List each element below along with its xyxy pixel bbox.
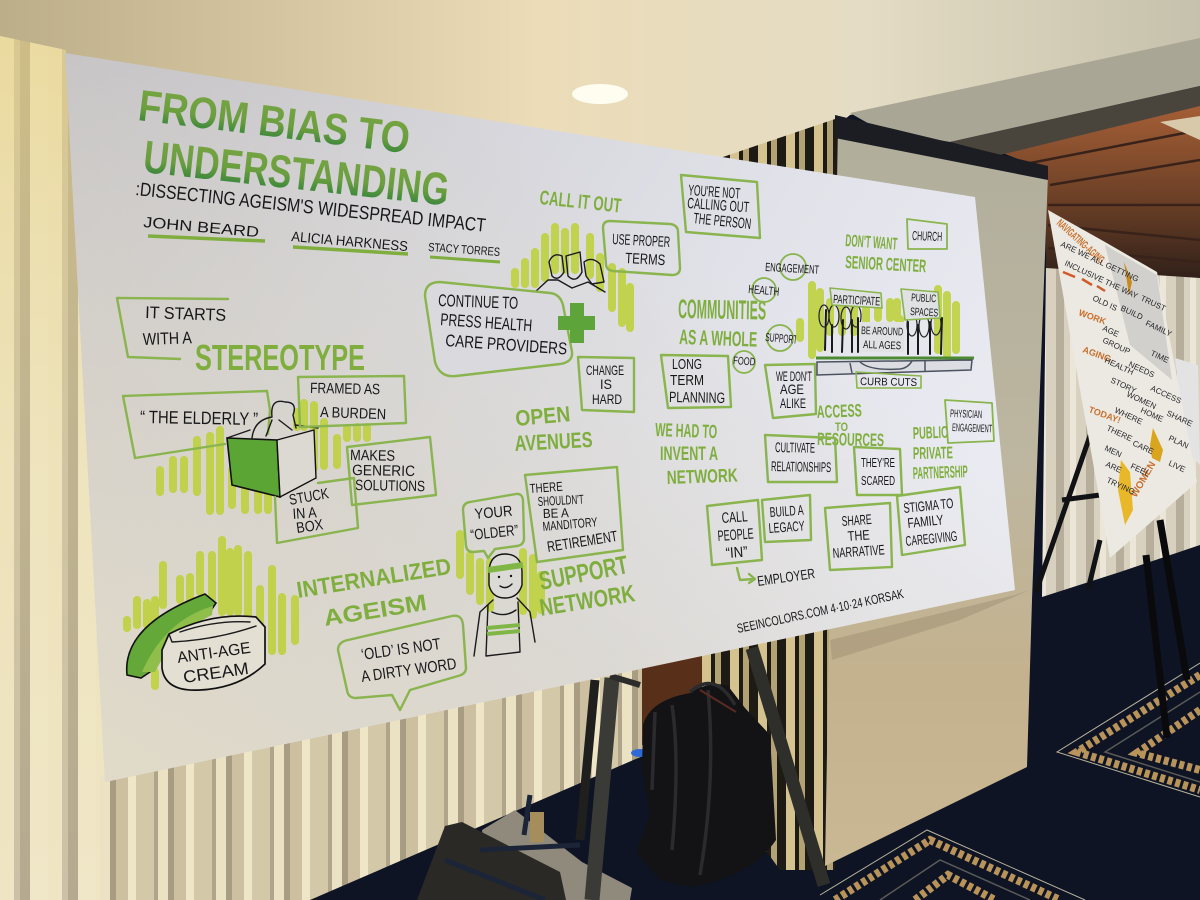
callout: mandatory retirement: SHOULDN'T — [537, 492, 584, 509]
callout: curb cuts: CURB CUTS — [860, 376, 917, 389]
callout: stuck in a box: STUCK — [288, 485, 330, 509]
callout: continue to press health care providers: CARE PROVIDERS — [445, 331, 568, 359]
callout: your older: YOUR — [474, 503, 513, 523]
upper striped curtain — [720, 118, 838, 200]
callout: church — [907, 219, 947, 249]
callout: public spaces — [901, 289, 940, 320]
callout: change is hard: IS — [600, 376, 612, 392]
panel: main graphic recording board: COMMUNITIES — [678, 294, 766, 326]
callout: stigma to family caregiving — [897, 487, 965, 555]
heading: internalized ageism: AGEISM — [322, 589, 429, 631]
second board notes: FAMILY — [1144, 319, 1174, 339]
callout: old is not a dirty word: ‘OLD’ IS NOT — [360, 636, 442, 664]
icon: green plus — [558, 303, 595, 343]
callout: use proper terms: USE PROPER — [612, 231, 671, 251]
callout: long term planning: PLANNING — [669, 389, 725, 407]
second board notes: ARE WE ALL GETTING — [1059, 240, 1140, 284]
callout: change is hard: CHANGE — [586, 362, 624, 378]
callout: they're scared: SCARED — [861, 473, 895, 488]
callout: stuck in a box — [275, 478, 358, 543]
callout: stuck in a box: IN A — [292, 504, 317, 523]
second board notes: FEEL — [1129, 462, 1152, 479]
callout: public spaces: SPACES — [910, 306, 938, 319]
second board notes: WHERE — [1113, 406, 1144, 426]
board shadow on wall — [830, 590, 1030, 660]
bubble: engagement — [765, 254, 820, 280]
callout: makes generic solutions — [347, 437, 436, 505]
heading: access to resources: RESOURCES — [817, 429, 884, 450]
scribble: behind person — [460, 534, 541, 615]
panel: main graphic recording board: PARTNERSHIP — [912, 462, 968, 483]
bubble: engagement: ENGAGEMENT — [765, 260, 820, 277]
callout: participate — [830, 288, 882, 308]
second board notes: INCLUSIVE THE WAY — [1063, 259, 1140, 301]
callout: build a legacy — [762, 495, 811, 542]
soffit plane — [850, 38, 1200, 142]
callout: mandatory retirement — [525, 467, 623, 562]
callout: change is hard — [578, 357, 634, 412]
heading: we had to invent a network — [655, 420, 738, 489]
board sheet — [1048, 210, 1197, 558]
callout: change is hard: HARD — [592, 391, 622, 407]
callout: we don't age alike: AGE — [780, 381, 804, 397]
callout: use proper terms — [603, 221, 680, 275]
wood panel — [642, 652, 702, 745]
callout: stuck in a box: BOX — [295, 516, 324, 537]
heading: access to resources: ACCESS — [816, 400, 862, 422]
callout: stigma to family caregiving: CAREGIVING — [905, 528, 958, 549]
callout: call people in: “IN” — [725, 543, 748, 562]
title: UNDERSTANDING — [141, 130, 452, 216]
second board notes: LIVE — [1167, 459, 1187, 474]
second board notes: THERE — [1105, 424, 1134, 443]
callout: share the narrative: NARRATIVE — [832, 541, 885, 561]
second board notes: SHARE — [1165, 409, 1194, 428]
callout: physician engagement: PHYSICIAN — [950, 408, 982, 421]
wood ceiling — [1000, 104, 1200, 282]
callout: cultivate relationships: RELATIONSHIPS — [771, 458, 831, 475]
scribble: behind neighbourhood — [800, 285, 956, 355]
callout: you're not calling out the person: THE PERSON — [693, 210, 752, 233]
blue glow — [631, 749, 649, 757]
icon: person with headband — [474, 554, 535, 656]
heading: public private partnership: PRIVATE — [913, 443, 953, 463]
heading: communities as a whole: AS A WHOLE — [679, 326, 758, 352]
callout: framed as a burden: FRAMED AS — [310, 380, 380, 398]
heading: we had to invent a network: INVENT A — [660, 444, 718, 465]
second board notes: ACCESS — [1149, 384, 1183, 406]
callout: mandatory retirement: THERE — [529, 479, 563, 496]
callout: we don't age alike: WE DON'T — [776, 368, 812, 384]
arrow: call people in to employer — [737, 568, 755, 583]
heading: access to resources — [816, 400, 884, 450]
poster behind — [1175, 358, 1200, 465]
icon: anti-age cream jar — [127, 594, 265, 690]
callout: continue to press health care providers — [425, 282, 572, 376]
callout: old is not a dirty word: A DIRTY WORD — [360, 656, 458, 686]
back wall panel — [825, 125, 1048, 866]
callout: framed as a burden: A BURDEN — [320, 404, 386, 423]
second board notes: MEN — [1103, 444, 1123, 459]
label: employer: EMPLOYER — [756, 565, 816, 589]
panel: second board on easel — [1036, 210, 1200, 738]
second board notes: TRUST — [1139, 294, 1167, 313]
callout: physician engagement: ENGAGEMENT — [952, 422, 992, 435]
heading: support network: NETWORK — [538, 580, 637, 622]
subtitle: :DISSECTING AGEISM'S WIDESPREAD IMPACT — [134, 179, 487, 237]
callout: framed as a burden — [298, 376, 406, 427]
callout: your older: “OLDER” — [470, 522, 519, 544]
callout: call people in: CALL — [721, 508, 748, 527]
second board notes: WOMEN — [1129, 460, 1158, 500]
backpack — [636, 684, 776, 887]
credit line: SEEINCOLORS.COM 4·10·24 KORSAK — [736, 586, 905, 636]
callout: physician engagement — [945, 400, 994, 443]
bubble: food: FOOD — [733, 355, 756, 369]
callout: makes generic solutions: GENERIC — [352, 462, 415, 480]
callout: use proper terms: TERMS — [625, 250, 666, 269]
callout: makes generic solutions: SOLUTIONS — [355, 477, 425, 495]
callout: you're not calling out the person — [681, 175, 760, 238]
second board notes: AGING — [1081, 344, 1112, 364]
callout: participate: PARTICIPATE — [833, 292, 881, 308]
heading: support network: SUPPORT — [536, 549, 631, 596]
callout: they're scared — [854, 447, 902, 495]
callout: be around all ages — [859, 322, 904, 352]
second board notes: OLD IS — [1091, 294, 1119, 313]
callout: call people in — [707, 500, 762, 565]
bubble: food — [733, 351, 756, 373]
callout: share the narrative — [825, 503, 892, 570]
icon: neighbourhood crowd and curb — [816, 305, 974, 375]
lower striped curtain — [700, 610, 835, 870]
scribble: behind stereotype box — [160, 403, 367, 511]
ceiling rail — [950, 86, 1200, 155]
callout: it starts with a stereotype: WITH A — [142, 328, 193, 349]
callout: long term planning — [661, 355, 731, 408]
title — [136, 81, 452, 216]
icon: person in a box — [227, 401, 318, 497]
heading: we had to invent a network: WE HAD TO — [655, 420, 718, 443]
second board notes: AGE — [1101, 324, 1120, 339]
easel — [580, 648, 824, 900]
callout: we don't age alike — [765, 364, 816, 418]
callout: share the narrative: SHARE — [841, 511, 872, 529]
callout: the elderly — [123, 391, 270, 458]
speakers — [143, 214, 501, 262]
callout: build a legacy: BUILD A — [769, 502, 805, 520]
heading: communities as a whole — [678, 294, 766, 352]
callout: stigma to family caregiving: FAMILY — [907, 511, 945, 531]
callout: cultivate relationships — [765, 435, 837, 482]
speakers: ALICIA HARKNESS — [291, 228, 409, 254]
callout: stigma to family caregiving: STIGMA TO — [903, 495, 954, 516]
callout: it starts with a stereotype: STEREOTYPE — [195, 337, 365, 378]
lower curtain — [100, 660, 645, 900]
heading: support network — [536, 549, 637, 622]
ceiling light — [572, 84, 628, 104]
callout: mandatory retirement: BE A — [543, 505, 569, 521]
callout: curb cuts — [856, 372, 921, 389]
icon: three faces — [535, 252, 605, 292]
heading: call it out: CALL IT OUT — [538, 187, 622, 218]
second board notes: TRYING — [1105, 476, 1136, 497]
wall top bar — [835, 115, 1048, 180]
callout: mandatory retirement: MANDITORY — [542, 514, 598, 534]
callout: long term planning: LONG — [672, 356, 702, 373]
callout: long term planning: TERM — [670, 372, 704, 389]
heading: we had to invent a network: NETWORK — [666, 466, 738, 489]
second board heading: NAVIGATING-AGING — [1054, 217, 1107, 266]
heading: internalized ageism: INTERNALIZED — [295, 553, 453, 603]
heading: internalized ageism — [295, 553, 453, 631]
callout: share the narrative: THE — [847, 526, 870, 544]
callout: you're not calling out the person: CALLING OUT — [687, 195, 750, 216]
title: FROM BIAS TO — [136, 81, 413, 163]
heading: don't want senior center: DON'T WANT — [845, 231, 898, 254]
bubble: support: SUPPORT — [765, 330, 798, 347]
second board notes: BUILD — [1119, 304, 1145, 322]
heading: open avenues: OPEN — [514, 401, 571, 431]
callout: public spaces: PUBLIC — [911, 292, 936, 305]
heading: don't want senior center: SENIOR CENTER — [845, 252, 927, 276]
left curtain — [0, 36, 108, 900]
heading: public private partnership — [912, 423, 968, 483]
second board notes: HOME — [1139, 406, 1165, 424]
bag on floor — [417, 795, 632, 900]
second board notes: WOMEN — [1125, 390, 1158, 411]
right easel rear legs — [1146, 520, 1187, 738]
callout: be around all ages: BE AROUND — [861, 325, 903, 338]
bubble: health — [748, 278, 780, 302]
callout: continue to press health care providers: PRESS HEALTH — [440, 310, 533, 335]
callout: cultivate relationships: CULTIVATE — [775, 439, 815, 456]
ceiling — [0, 0, 1200, 220]
callout: be around all ages: ALL AGES — [863, 339, 901, 352]
callout: it starts with a stereotype — [117, 298, 365, 378]
callout: the elderly: “ THE ELDERLY ” — [140, 407, 258, 429]
callout: it starts with a stereotype: IT STARTS — [145, 303, 226, 325]
bubble: health: HEALTH — [748, 282, 780, 299]
speakers: STACY TORRES — [428, 240, 501, 259]
callout: mandatory retirement: RETIREMENT — [546, 528, 619, 556]
callout: old is not a dirty word — [338, 616, 466, 710]
second board notes: GROUP — [1101, 336, 1132, 356]
icon: anti-age cream jar: ANTI-AGE — [176, 640, 252, 667]
right easel — [1036, 430, 1100, 592]
second board notes: TODAY! — [1087, 404, 1122, 425]
scribble: behind cream jar — [127, 540, 295, 686]
heading: access to resources: TO — [835, 420, 848, 434]
second board notes — [1059, 240, 1194, 525]
callout: you're not calling out the person: YOU'RE NOT — [688, 182, 741, 203]
second board notes: ARE — [1104, 460, 1123, 475]
heading: open avenues — [514, 401, 593, 456]
callout: your older — [463, 494, 524, 558]
callout: we don't age alike: ALIKE — [780, 395, 806, 411]
second board notes: STORY — [1109, 376, 1138, 396]
second board notes: WORK — [1077, 307, 1108, 327]
callout: makes generic solutions: MAKES — [350, 447, 395, 465]
second board notes: CARE — [1131, 439, 1155, 456]
second board notes: TIME — [1149, 349, 1170, 365]
callout: call people in: PEOPLE — [717, 526, 754, 545]
second board notes: PLAN — [1167, 434, 1190, 451]
carpet pattern right — [1057, 663, 1200, 797]
panel: main graphic recording board — [65, 53, 1015, 782]
icon: anti-age cream jar: CREAM — [182, 659, 250, 687]
heading: don't want senior center — [845, 231, 927, 276]
callout: church: CHURCH — [912, 228, 942, 244]
bubble: support — [765, 325, 798, 351]
callout: they're scared: THEY'RE — [861, 455, 895, 470]
right curtains — [1042, 268, 1200, 597]
speakers: JOHN BEARD — [143, 214, 260, 241]
heading: open avenues: AVENUES — [514, 427, 593, 456]
second board notes: HEALTH — [1103, 356, 1135, 377]
heading: public private partnership: PUBLIC — [912, 423, 948, 443]
callout: continue to press health care providers: CONTINUE TO — [438, 291, 518, 313]
scribble: behind faces — [515, 227, 630, 328]
callout: build a legacy: LEGACY — [768, 517, 806, 536]
carpet pattern bottom — [820, 830, 1085, 900]
second board notes: NEEDS — [1127, 360, 1156, 379]
